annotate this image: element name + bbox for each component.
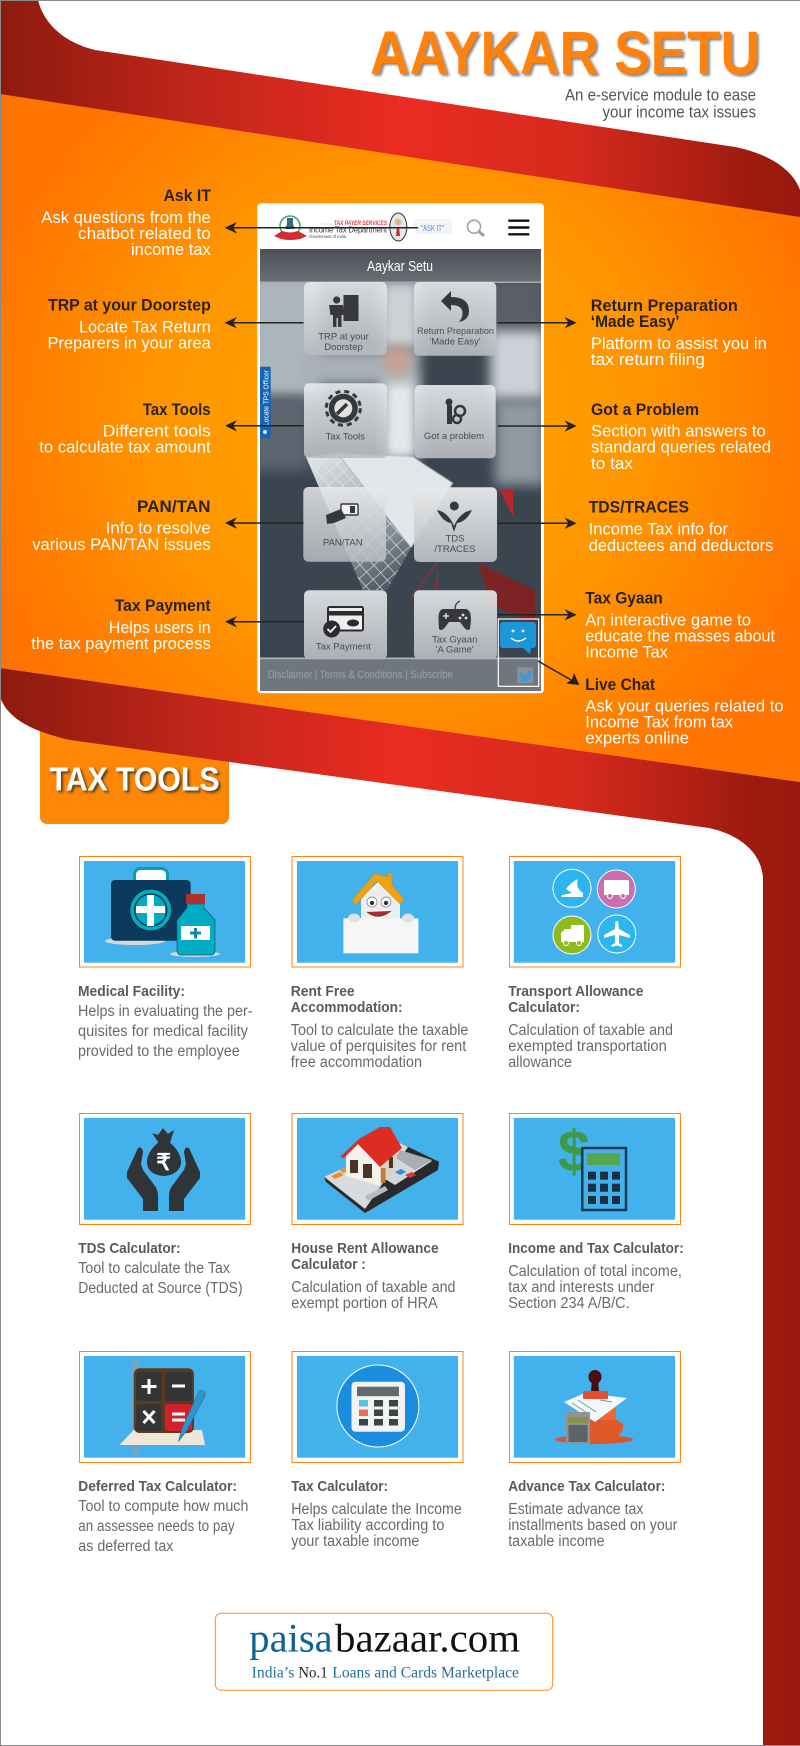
top red band	[0, 0, 800, 260]
arrow: return preparation	[498, 317, 577, 328]
text: house rent allowance: exempt portion of HRA	[291, 1295, 438, 1312]
arrow: ask it	[224, 222, 418, 234]
text: income and tax	[508, 1240, 684, 1312]
text: deferred tax: Tool to compute how much	[78, 1498, 248, 1515]
locate tab	[260, 367, 271, 438]
arrow: tax payment	[225, 616, 304, 628]
callout: pan tan: PAN/TAN	[137, 498, 210, 516]
card: deferred tax	[80, 1352, 250, 1462]
department text: Income Tax Department	[309, 226, 388, 234]
department text: TAX PAYER SERVICES	[334, 221, 387, 227]
card: advance tax	[510, 1352, 680, 1462]
lower red band	[0, 668, 800, 1746]
button: tax tools: Tax Tools	[326, 432, 365, 443]
callout: ask it	[41, 187, 211, 259]
text: tds calculator	[78, 1240, 243, 1297]
callout: trp: Locate Tax Return	[79, 317, 211, 336]
button: tax gyaan	[414, 590, 497, 659]
locate tab: Locate TPS Officer	[262, 370, 270, 426]
text: medical facility: quisites for medical facility	[78, 1023, 248, 1040]
button: got a problem: Got a problem	[424, 431, 484, 442]
callout: tds traces: TDS/TRACES	[589, 499, 689, 517]
callout: pan tan	[32, 498, 211, 554]
text: deferred tax: as deferred tax	[78, 1538, 174, 1555]
header bar: Aaykar Setu	[367, 259, 433, 275]
text: income and tax: Calculation of total income,	[508, 1263, 682, 1280]
callout: trp: TRP at your Doorstep	[48, 297, 211, 315]
logo: paisabazaar: India’s	[252, 1665, 294, 1682]
callout: pan tan: Info to resolve	[106, 519, 211, 538]
text: house rent allowance: Calculator :	[291, 1256, 366, 1273]
text: rent free accommodation	[291, 983, 468, 1071]
button: tax payment	[304, 590, 387, 659]
callout: return preparation: ‘Made Easy’	[591, 313, 680, 331]
arrow: live chat	[538, 661, 579, 685]
callout: tax tools: Different tools	[103, 422, 211, 441]
logo: paisabazaar: bazaar.com	[335, 1615, 520, 1660]
ask it pill	[412, 219, 452, 234]
callout: return preparation	[591, 297, 767, 369]
card: medical facility	[80, 856, 250, 967]
card: tax calculator	[292, 1352, 463, 1462]
button: tds traces	[414, 487, 497, 562]
text: advance tax	[508, 1478, 677, 1550]
phone screen background	[260, 283, 541, 660]
text: medical facility: provided to the employee	[78, 1043, 240, 1060]
subtitle	[565, 86, 756, 122]
live chat highlight	[498, 619, 539, 686]
button: return preparation: 'Made Easy'	[429, 337, 481, 348]
button: pan tan: PAN/TAN	[323, 538, 363, 549]
logo: paisabazaar: No.1	[298, 1665, 328, 1682]
text: deferred tax: Deferred Tax Calculator:	[78, 1478, 237, 1495]
button: TRP	[304, 282, 387, 355]
callout: tax tools: to calculate tax amount	[39, 438, 211, 457]
text: advance tax: taxable income	[508, 1533, 605, 1550]
icon: calculator with dollar: $	[558, 1119, 590, 1184]
text: transport allowance: Calculator:	[508, 999, 580, 1016]
button: TRP: Doorstep	[324, 342, 363, 353]
text: house rent allowance: House Rent Allowance	[291, 1240, 439, 1257]
text: transport allowance	[508, 983, 673, 1071]
callout: pan tan: various PAN/TAN issues	[32, 535, 211, 554]
text: deferred tax: an assessee needs to pay	[78, 1518, 235, 1535]
button: tax payment: Tax Payment	[316, 641, 371, 652]
subtitle: your income tax issues	[602, 103, 756, 122]
callout: ask it: chatbot related to	[78, 224, 211, 243]
icon: house with sign	[343, 873, 418, 953]
icon: chat bubble	[500, 622, 536, 654]
callout: tds traces	[589, 499, 773, 555]
button: tax gyaan: 'A Game'	[436, 645, 474, 656]
text: income and tax: Section 234 A/B/C.	[508, 1295, 630, 1312]
callout: tds traces: Income Tax info for	[589, 520, 728, 539]
button: TRP: TRP at your	[318, 331, 369, 342]
arrow: pan tan	[225, 517, 304, 529]
text: tds calculator: TDS Calculator:	[78, 1240, 180, 1257]
callout: ask it: income tax	[131, 240, 211, 259]
subtitle: An e-service module to ease	[565, 86, 756, 105]
footer bar: Disclaimer | Terms & Conditions | Subscribe	[268, 669, 453, 681]
text: advance tax: installments based on your	[508, 1517, 677, 1534]
text: medical facility: Helps in evaluating the per-	[78, 1003, 252, 1020]
header bar	[260, 249, 541, 283]
button: tds traces: TDS	[446, 534, 464, 545]
button: tds traces: /TRACES	[434, 544, 476, 555]
logo: paisabazaar	[215, 1613, 553, 1690]
text: transport allowance: Calculation of taxable and	[508, 1022, 673, 1039]
text: rent free accommodation: value of perquisites for rent	[291, 1038, 467, 1055]
card: transport allowance	[510, 856, 680, 967]
icon: round calculator	[337, 1365, 419, 1447]
button: return preparation	[414, 282, 496, 356]
callout: got a problem: standard queries related	[591, 438, 771, 457]
text: tax calculator: Helps calculate the Income	[291, 1501, 462, 1518]
icon: twitter	[517, 667, 533, 683]
text: house rent allowance	[291, 1240, 456, 1312]
button: pan tan	[303, 487, 386, 562]
logo: paisabazaar: Loans and Cards Marketplace	[332, 1665, 519, 1682]
callout: trp: Preparers in your area	[48, 333, 211, 352]
callout: got a problem: Section with answers to	[591, 422, 766, 441]
callout: return preparation: Platform to assist you in	[591, 334, 767, 353]
button: tax tools	[304, 383, 387, 458]
callout: got a problem	[591, 401, 771, 473]
text: advance tax: Advance Tax Calculator:	[508, 1478, 665, 1495]
icon: menu	[508, 221, 529, 234]
callout: tax payment: Tax Payment	[115, 597, 211, 615]
arrow: got a problem	[498, 420, 577, 432]
callout: tax payment: Helps users in	[109, 618, 211, 637]
button: return preparation: Return Preparation	[417, 326, 494, 337]
text: house rent allowance: Calculation of taxable and	[291, 1279, 456, 1296]
card: rent free accommodation	[292, 856, 463, 967]
text: tds calculator: Tool to calculate the Tax	[78, 1260, 230, 1277]
callout: return preparation: Return Preparation	[591, 297, 738, 315]
arrow: tax gyaan	[498, 609, 577, 620]
text: transport allowance: allowance	[508, 1054, 572, 1071]
callout: tax gyaan: Income Tax	[585, 643, 668, 662]
icon: stamp and papers	[555, 1370, 633, 1444]
text: income and tax: Income and Tax Calculator:	[508, 1240, 684, 1257]
callout: tax gyaan: educate the masses about	[585, 627, 775, 646]
text: transport allowance: Transport Allowance	[508, 983, 643, 1000]
department text: Government of India	[309, 234, 346, 239]
text: advance tax: Estimate advance tax	[508, 1501, 644, 1518]
footer bar	[260, 658, 541, 691]
arrow: tds traces	[498, 518, 577, 529]
text: rent free accommodation: Tool to calculate the taxable	[291, 1022, 468, 1039]
tax tools heading: TAX TOOLS	[50, 761, 220, 798]
card: tds calculator	[80, 1114, 250, 1224]
title: AAYKAR SETU	[370, 19, 760, 87]
callout: live chat: Income Tax from tax	[585, 713, 733, 732]
card: income and tax	[510, 1114, 680, 1224]
callout: live chat: Ask your queries related to	[585, 697, 784, 716]
icon: calculator with pencil	[119, 1360, 205, 1455]
tax tools tab	[40, 725, 229, 824]
text: deferred tax	[78, 1478, 248, 1555]
card: house rent allowance	[292, 1114, 463, 1224]
arrow: trp	[224, 317, 304, 328]
button: tax gyaan: Tax Gyaan	[432, 634, 477, 645]
text: tax calculator: your taxable income	[291, 1533, 419, 1550]
callout: got a problem: to tax	[591, 454, 633, 473]
callout: tax gyaan: An interactive game to	[585, 611, 751, 630]
text: transport allowance: exempted transportation	[508, 1038, 667, 1055]
callout: trp	[48, 297, 211, 352]
callout: live chat	[585, 676, 784, 748]
text: tax calculator: Tax Calculator:	[291, 1478, 388, 1495]
callout: tds traces: deductees and deductors	[589, 536, 773, 555]
callout: got a problem: Got a Problem	[591, 401, 699, 419]
callout: ask it: Ask questions from the	[41, 208, 211, 227]
text: rent free accommodation: free accommodation	[291, 1054, 422, 1071]
icon: house on calculator	[324, 1127, 439, 1213]
text: tax calculator: Tax liability according to	[291, 1517, 444, 1534]
callout: return preparation: tax return filing	[591, 350, 705, 369]
text: tds calculator: Deducted at Source (TDS)	[78, 1280, 243, 1297]
department text	[309, 221, 388, 239]
callout: tax tools	[39, 401, 211, 457]
callout: tax payment: the tax payment process	[31, 634, 211, 653]
button: got a problem	[415, 385, 496, 458]
icon: hands with money bag: ₹	[156, 1149, 171, 1175]
callout: tax tools: Tax Tools	[143, 401, 211, 419]
icon: calculator with dollar	[558, 1119, 626, 1210]
ask it pill: "ASK IT"	[421, 223, 444, 233]
arrow: tax tools	[225, 420, 304, 432]
text: rent free accommodation: Rent Free	[291, 983, 355, 1000]
orange panel	[0, 94, 800, 782]
icon: transport circles	[553, 869, 636, 954]
text: medical facility	[78, 983, 252, 1060]
icon: first aid kit	[105, 868, 220, 957]
text: income and tax: tax and interests under	[508, 1279, 655, 1296]
callout: live chat: Live Chat	[585, 676, 655, 694]
phone screenshot	[250, 203, 545, 693]
icon: hands with money bag	[127, 1128, 200, 1211]
callout: live chat: experts online	[585, 729, 689, 748]
icon: search	[468, 220, 484, 236]
text: medical facility: Medical Facility:	[78, 983, 185, 1000]
callout: tax payment	[31, 597, 211, 653]
text: rent free accommodation: Accommodation:	[291, 999, 403, 1016]
logo: paisabazaar: paisa	[249, 1615, 333, 1660]
emblem	[274, 216, 307, 240]
callout: tax gyaan: Tax Gyaan	[585, 590, 663, 608]
text: tax calculator	[291, 1478, 462, 1550]
callout: tax gyaan	[585, 590, 775, 662]
callout: ask it: Ask IT	[164, 187, 211, 205]
mascot	[390, 213, 407, 241]
